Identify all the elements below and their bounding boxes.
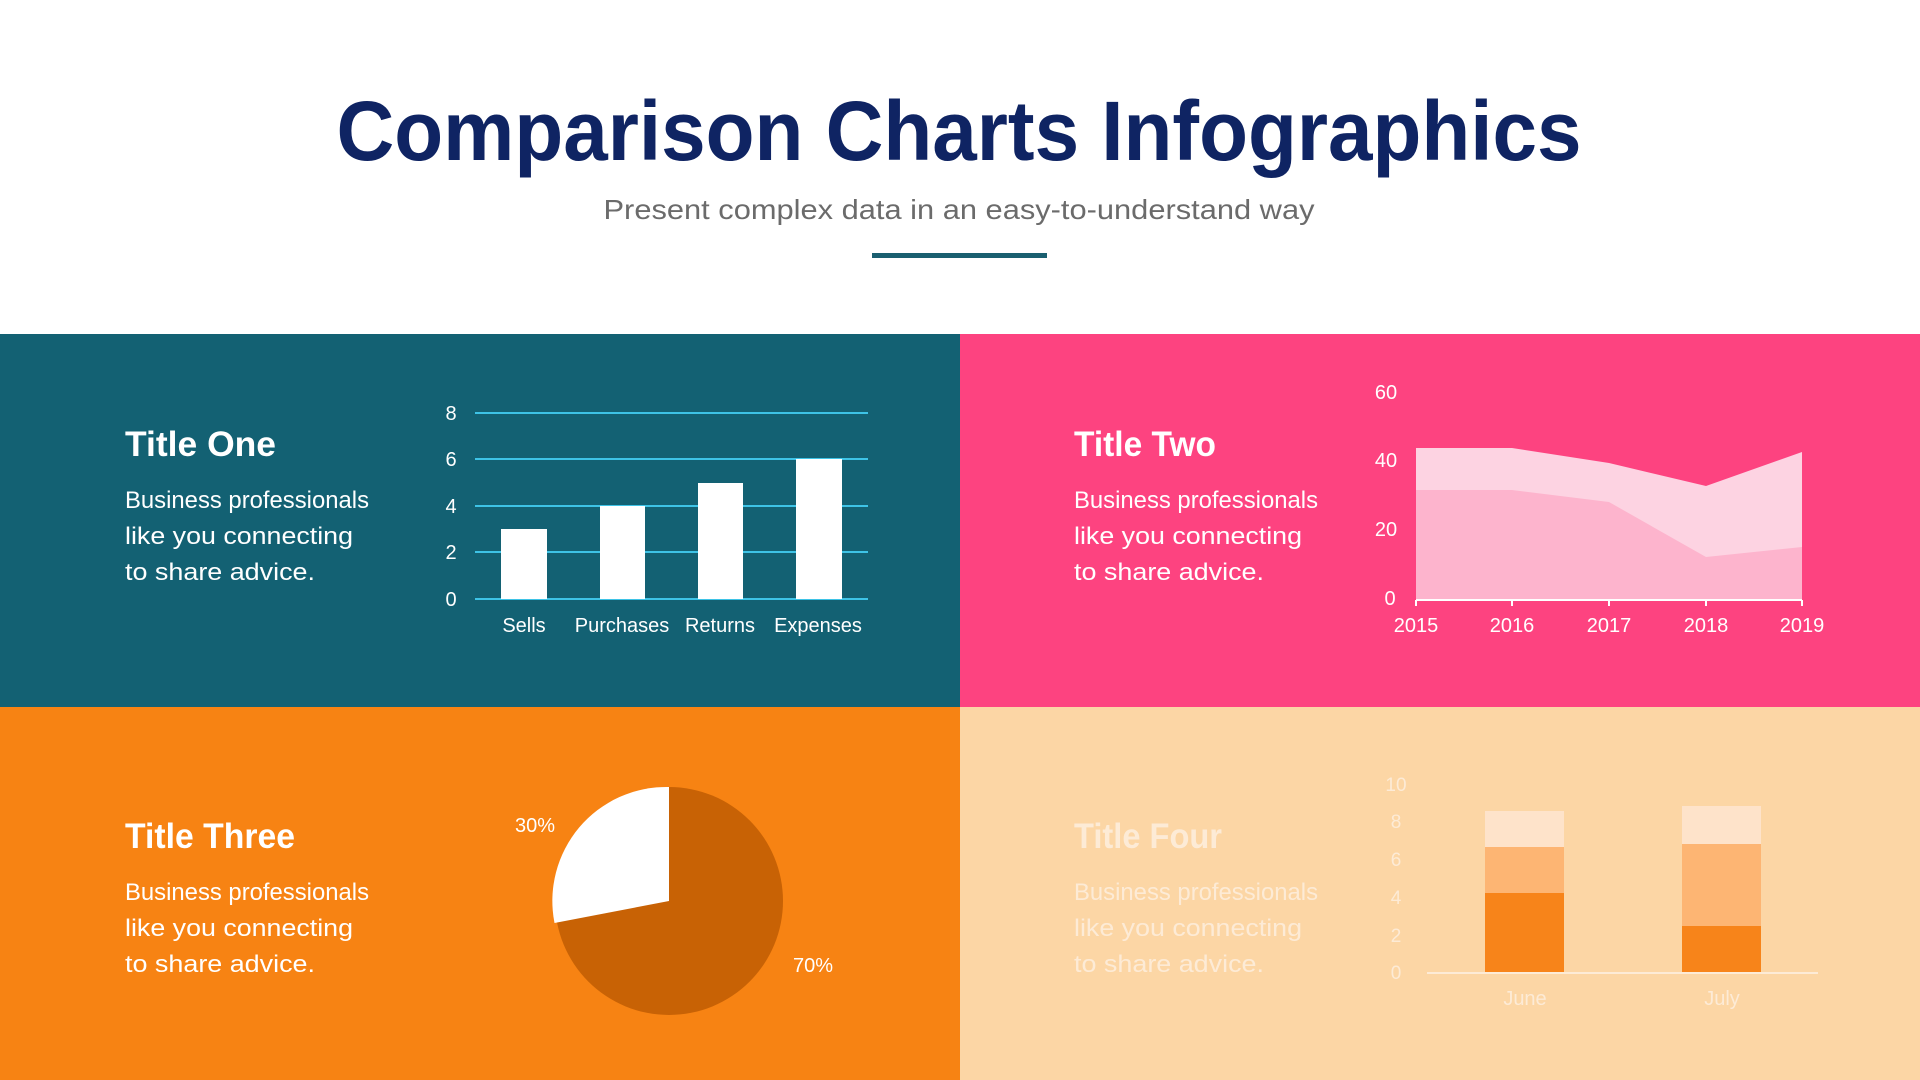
title underline: [872, 253, 1047, 258]
text block: title two: [1074, 487, 1318, 586]
bar chart: 0: [445, 589, 457, 611]
bar chart: Sells: [502, 615, 546, 637]
bar chart: Purchases: [575, 615, 669, 637]
stacked bar chart: July: [1704, 988, 1740, 1010]
text block: title two: to share advice.: [1074, 559, 1264, 586]
heading: title one: Title One: [125, 425, 276, 464]
text block: title one: Business professionals: [125, 487, 369, 514]
bar chart: 6: [445, 449, 457, 471]
bar chart: Expenses: [774, 615, 862, 637]
bar chart: 8: [445, 403, 457, 425]
subtitle: Present complex data in an easy-to-understand way: [604, 194, 1314, 225]
heading: title three: Title Three: [125, 817, 295, 856]
heading: title two: Title Two: [1074, 425, 1216, 464]
text block: title one: to share advice.: [125, 559, 315, 586]
stacked bar chart: 2: [1391, 926, 1401, 947]
heading: title four: Title Four: [1074, 817, 1222, 856]
text block: title one: like you connecting: [125, 523, 353, 550]
panel: title four: [960, 707, 1920, 1080]
area chart: 2015: [1394, 615, 1438, 637]
area chart: 2018: [1684, 615, 1728, 637]
text block: title two: like you connecting: [1074, 523, 1302, 550]
stacked bar chart: 8: [1391, 812, 1401, 833]
area chart: 0: [1384, 588, 1396, 610]
panel: title three: [0, 707, 960, 1080]
stacked bar chart: 6: [1391, 850, 1401, 871]
text block: title four: to share advice.: [1074, 951, 1264, 978]
pie chart: [515, 787, 833, 1015]
stacked bar chart: [1385, 775, 1818, 1010]
pie chart: 30%: [515, 815, 555, 837]
bar chart: 4: [445, 496, 457, 518]
text block: title three: Business professionals: [125, 879, 369, 906]
stacked bar chart: 4: [1391, 888, 1402, 909]
text block: title four: like you connecting: [1074, 915, 1302, 942]
text block: title four: [1074, 879, 1318, 978]
text block: title four: Business professionals: [1074, 879, 1318, 906]
text block: title three: [125, 879, 369, 978]
bar chart: [445, 403, 868, 637]
stacked bar chart: 0: [1391, 963, 1401, 984]
text block: title three: like you connecting: [125, 915, 353, 942]
stacked bar chart: June: [1503, 988, 1547, 1010]
pie chart: 70%: [793, 955, 833, 977]
stacked bar chart: 10: [1385, 775, 1407, 796]
area chart: 2016: [1490, 615, 1534, 637]
area chart: [1375, 382, 1824, 637]
area chart: 20: [1375, 519, 1397, 541]
panel: title one: [0, 334, 960, 707]
text block: title one: [125, 487, 369, 586]
bar chart: 2: [445, 542, 457, 564]
panel: title two: [960, 334, 1920, 707]
text block: title two: Business professionals: [1074, 487, 1318, 514]
bar chart: Returns: [685, 615, 755, 637]
area chart: 60: [1375, 382, 1397, 404]
text block: title three: to share advice.: [125, 951, 315, 978]
area chart: 2017: [1587, 615, 1631, 637]
area chart: 2019: [1780, 615, 1824, 637]
area chart: 40: [1375, 450, 1397, 472]
title: Comparison Charts Infographics: [336, 84, 1582, 178]
